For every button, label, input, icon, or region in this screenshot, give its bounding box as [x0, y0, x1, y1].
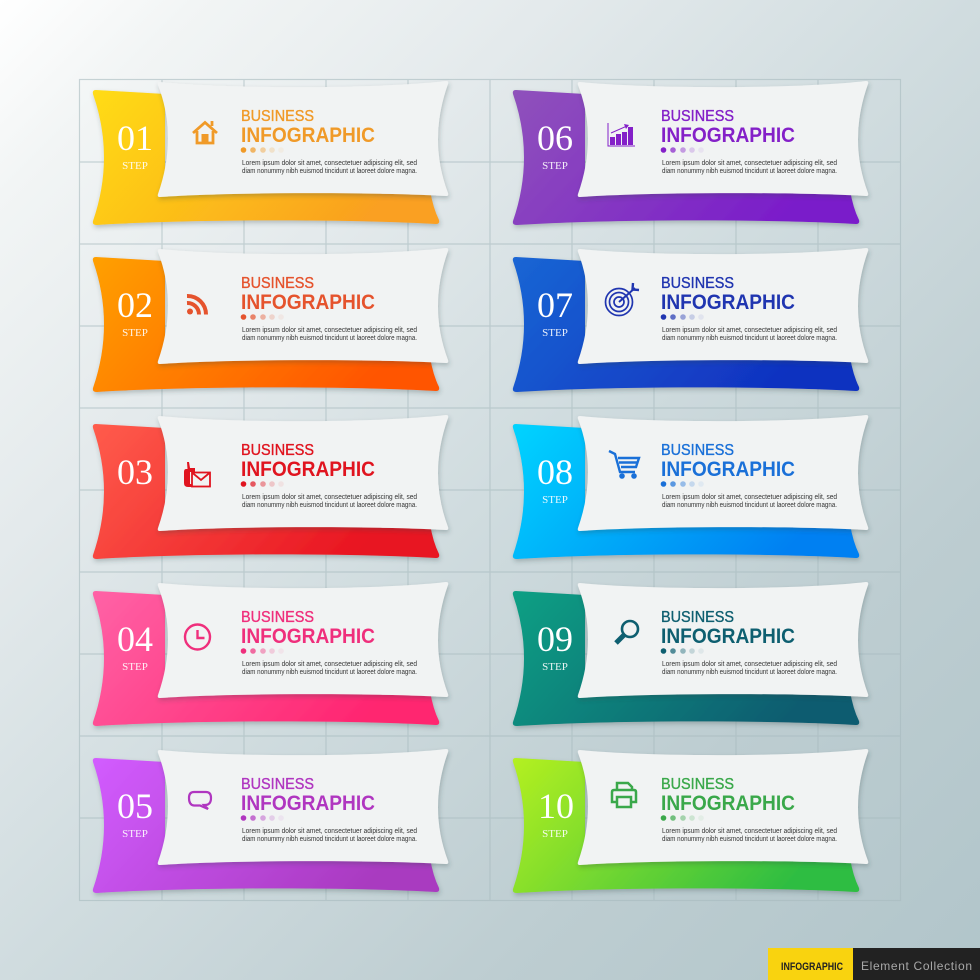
body text	[242, 494, 417, 509]
body text: diam nonummy nibh euismod tincidunt ut laoreet dolore magna.	[242, 168, 417, 175]
number: 10: 10	[538, 786, 574, 826]
heading: business: BUSINESS	[241, 442, 314, 459]
body text: diam nonummy nibh euismod tincidunt ut laoreet dolore magna.	[662, 502, 837, 509]
card: step 06	[513, 81, 868, 225]
body text: Lorem ipsum dolor sit amet, consectetuer adipiscing elit, sed	[242, 494, 417, 501]
card: step 02	[93, 248, 448, 392]
card: step 08	[513, 415, 868, 559]
number: 06: 06	[537, 118, 573, 158]
icon: bar chart	[608, 123, 635, 146]
heading: business: BUSINESS	[241, 108, 314, 125]
icon: target	[606, 283, 639, 316]
dots	[661, 815, 704, 821]
number: 08: 08	[537, 452, 573, 492]
panel: step 02	[158, 248, 448, 364]
ribbon: step 07	[513, 257, 859, 392]
label: step: STEP	[542, 828, 568, 840]
number: 09: 09	[537, 619, 573, 659]
panel: step 09	[578, 582, 868, 698]
ribbon: step 05	[93, 758, 439, 893]
footer badge	[768, 948, 980, 980]
number: 02: 02	[117, 285, 153, 325]
body text	[662, 661, 837, 676]
heading: infographic: INFOGRAPHIC	[241, 458, 375, 481]
dots	[661, 147, 704, 153]
heading: business: BUSINESS	[661, 776, 734, 793]
label: step: STEP	[542, 661, 568, 673]
ribbon: step 03	[93, 424, 439, 559]
body text	[242, 661, 417, 676]
heading: business: BUSINESS	[661, 275, 734, 292]
dots	[661, 314, 704, 320]
icon: clock	[185, 624, 210, 650]
icon: printer	[612, 783, 636, 807]
body text: diam nonummy nibh euismod tincidunt ut laoreet dolore magna.	[242, 836, 417, 843]
body text: diam nonummy nibh euismod tincidunt ut laoreet dolore magna.	[242, 669, 417, 676]
number: 01: 01	[117, 118, 153, 158]
heading: infographic: INFOGRAPHIC	[661, 124, 795, 147]
card: step 10	[513, 749, 868, 893]
dots	[241, 815, 284, 821]
body text: Lorem ipsum dolor sit amet, consectetuer adipiscing elit, sed	[242, 661, 417, 668]
dots	[661, 481, 704, 487]
heading: infographic: INFOGRAPHIC	[661, 291, 795, 314]
panel: step 01	[158, 81, 448, 197]
heading: business: BUSINESS	[241, 776, 314, 793]
heading: infographic: INFOGRAPHIC	[241, 124, 375, 147]
panel: step 05	[158, 749, 448, 865]
panel: step 03	[158, 415, 448, 531]
body text	[662, 160, 837, 175]
body text: Lorem ipsum dolor sit amet, consectetuer adipiscing elit, sed	[242, 828, 417, 835]
heading: infographic: INFOGRAPHIC	[661, 458, 795, 481]
number: 03: 03	[117, 452, 153, 492]
body text: diam nonummy nibh euismod tincidunt ut laoreet dolore magna.	[662, 669, 837, 676]
body text: Lorem ipsum dolor sit amet, consectetuer adipiscing elit, sed	[242, 160, 417, 167]
heading: business: BUSINESS	[661, 442, 734, 459]
ribbon: step 09	[513, 591, 859, 726]
body text	[242, 828, 417, 843]
panel: step 06	[578, 81, 868, 197]
body text: diam nonummy nibh euismod tincidunt ut laoreet dolore magna.	[662, 168, 837, 175]
card: step 09	[513, 582, 868, 726]
body text: Lorem ipsum dolor sit amet, consectetuer adipiscing elit, sed	[662, 494, 837, 501]
footer label: element collection: Element Collection	[861, 959, 972, 973]
label: step: STEP	[542, 327, 568, 339]
icon: rss	[187, 296, 206, 314]
heading: infographic: INFOGRAPHIC	[661, 792, 795, 815]
icon: phone and mail	[184, 462, 210, 487]
panel: step 10	[578, 749, 868, 865]
ribbon: step 08	[513, 424, 859, 559]
label: step: STEP	[542, 160, 568, 172]
panel: step 04	[158, 582, 448, 698]
heading: infographic: INFOGRAPHIC	[241, 625, 375, 648]
card: step 07	[513, 248, 868, 392]
heading: business: BUSINESS	[661, 108, 734, 125]
body text: diam nonummy nibh euismod tincidunt ut laoreet dolore magna.	[242, 502, 417, 509]
ribbon: step 10	[513, 758, 859, 893]
body text: diam nonummy nibh euismod tincidunt ut laoreet dolore magna.	[662, 836, 837, 843]
icon: speech bubble	[189, 792, 211, 809]
number: 05: 05	[117, 786, 153, 826]
card: step 01	[93, 81, 448, 225]
ribbon: step 01	[93, 90, 439, 225]
body text: diam nonummy nibh euismod tincidunt ut laoreet dolore magna.	[662, 335, 837, 342]
number: 07: 07	[537, 285, 573, 325]
body text	[662, 327, 837, 342]
card: step 03	[93, 415, 448, 559]
label: step: STEP	[122, 661, 148, 673]
body text: Lorem ipsum dolor sit amet, consectetuer adipiscing elit, sed	[662, 327, 837, 334]
body text	[662, 494, 837, 509]
card: step 05	[93, 749, 448, 893]
body text	[662, 828, 837, 843]
footer label: infographic: INFOGRAPHIC	[781, 961, 843, 973]
icon: magnifier	[616, 621, 638, 643]
label: step: STEP	[122, 327, 148, 339]
body text: Lorem ipsum dolor sit amet, consectetuer adipiscing elit, sed	[662, 160, 837, 167]
heading: business: BUSINESS	[241, 275, 314, 292]
heading: infographic: INFOGRAPHIC	[241, 792, 375, 815]
dots	[241, 648, 284, 654]
body text: diam nonummy nibh euismod tincidunt ut laoreet dolore magna.	[242, 335, 417, 342]
label: step: STEP	[542, 494, 568, 506]
ribbon: step 02	[93, 257, 439, 392]
dots	[661, 648, 704, 654]
body text: Lorem ipsum dolor sit amet, consectetuer adipiscing elit, sed	[242, 327, 417, 334]
heading: business: BUSINESS	[241, 609, 314, 626]
heading: infographic: INFOGRAPHIC	[241, 291, 375, 314]
body text	[242, 160, 417, 175]
icon: shopping cart	[609, 451, 639, 478]
ribbon: step 04	[93, 591, 439, 726]
icon: house	[193, 121, 217, 143]
dots	[241, 481, 284, 487]
number: 04: 04	[117, 619, 153, 659]
body text	[242, 327, 417, 342]
label: step: STEP	[122, 160, 148, 172]
body text: Lorem ipsum dolor sit amet, consectetuer adipiscing elit, sed	[662, 661, 837, 668]
heading: infographic: INFOGRAPHIC	[661, 625, 795, 648]
card: step 04	[93, 582, 448, 726]
ribbon: step 06	[513, 90, 859, 225]
label: step: STEP	[122, 828, 148, 840]
body text: Lorem ipsum dolor sit amet, consectetuer adipiscing elit, sed	[662, 828, 837, 835]
heading: business: BUSINESS	[661, 609, 734, 626]
panel: step 07	[578, 248, 868, 364]
dots	[241, 147, 284, 153]
panel: step 08	[578, 415, 868, 531]
dots	[241, 314, 284, 320]
